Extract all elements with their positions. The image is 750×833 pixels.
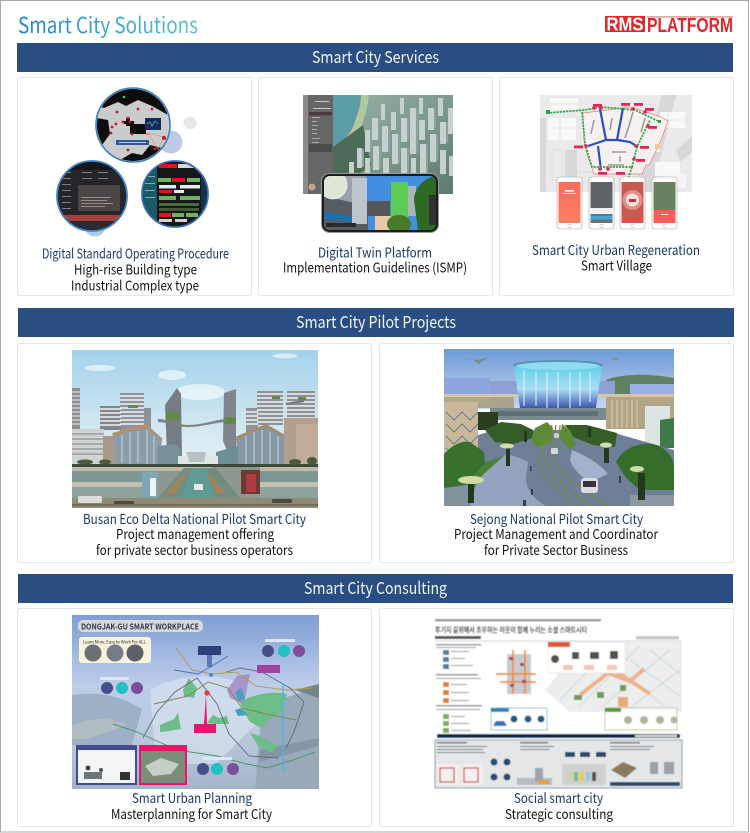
caption: Smart City Urban Regeneration: Smart Village [581,254,652,274]
caption: Digital Twin Platform: Implementation Guidelines (ISMP) [283,256,467,276]
heading bar: pilot projects [18,308,734,337]
caption: Smart Urban Planning [111,787,272,823]
illustration: Dongjak-gu smart workplace map: DONGJAK-GU SMART WORKPLACE [81,620,199,632]
illustration: Dongjak-gu smart workplace map [72,615,319,789]
caption: Smart Urban Planning: Smart Urban Planning [132,787,252,807]
caption: Sejong [454,508,659,559]
caption: Digital Twin Platform: Digital Twin Platform [318,242,432,262]
caption: Sejong: Project Management and Coordinator [454,523,659,543]
heading bar: services: Smart City Services [312,44,439,68]
panel: Digital Standard Operating Procedure [18,78,252,296]
caption: Social smart city [505,787,613,823]
illustration: urban regeneration map and four phones [540,95,692,229]
caption: Busan Eco Delta: Project management offering [116,523,274,543]
caption: Digital Twin Platform [283,242,467,276]
caption: Digital Standard Operating Procedure: Digital Standard Operating Procedure [42,242,229,262]
illustration: Busan Eco Delta rendering [72,350,318,508]
illustration: social smart city plan board: 투기지 길위에서 조우하는 이웃이 함께 누리는 소셜 스마트시티 [435,626,587,636]
caption: Digital Standard Operating Procedure: High-rise Building type [74,258,197,278]
illustration: digital twin screen and phone [303,95,453,233]
section: Smart City Consulting [18,574,734,826]
panel: Smart City Urban Regeneration [500,78,734,296]
caption: Busan Eco Delta: Busan Eco Delta National Pilot Smart City [83,508,306,528]
heading bar: consulting: Smart City Consulting [304,575,448,599]
panel: Digital Twin Platform [258,78,492,296]
logo: RMS Platform [605,14,733,37]
caption: Sejong: for Private Sector Business [484,539,628,559]
illustration: Sejong pilot city rendering [444,349,674,506]
caption: Digital Standard Operating Procedure [42,242,229,294]
caption: Digital Standard Operating Procedure: Industrial Complex type [71,274,199,294]
caption: Sejong: Sejong National Pilot Smart City [470,508,643,528]
heading bar: consulting [18,574,733,603]
caption: Smart City Urban Regeneration: Smart City Urban Regeneration [532,239,700,259]
panel: Smart Urban Planning [18,608,372,826]
caption: Social smart city: Social smart city [514,787,603,807]
caption: Busan Eco Delta [83,508,306,559]
illustration: three monitoring circles [57,88,208,236]
logo: RMS Platform: RMS [606,14,644,34]
caption: Social smart city: Strategic consulting [505,803,613,823]
heading bar: pilot projects: Smart City Pilot Projects [296,309,456,333]
panel: Busan Eco Delta [18,344,372,562]
title: Smart City Solutions [18,8,198,40]
section: Smart City Pilot Projects [18,308,734,562]
heading bar: services [17,43,733,72]
caption: Smart City Urban Regeneration [532,239,700,274]
section: Smart City Services [17,43,734,296]
illustration: Dongjak-gu smart workplace map: Learn More, Easy to Work For ALL [83,638,147,646]
illustration: social smart city plan board [435,617,682,788]
caption: Smart Urban Planning: Masterplanning for Smart City [111,803,272,823]
panel: Social smart city [380,608,734,826]
panel: Sejong [380,344,734,562]
caption: Busan Eco Delta: for private sector business operators [96,539,293,559]
